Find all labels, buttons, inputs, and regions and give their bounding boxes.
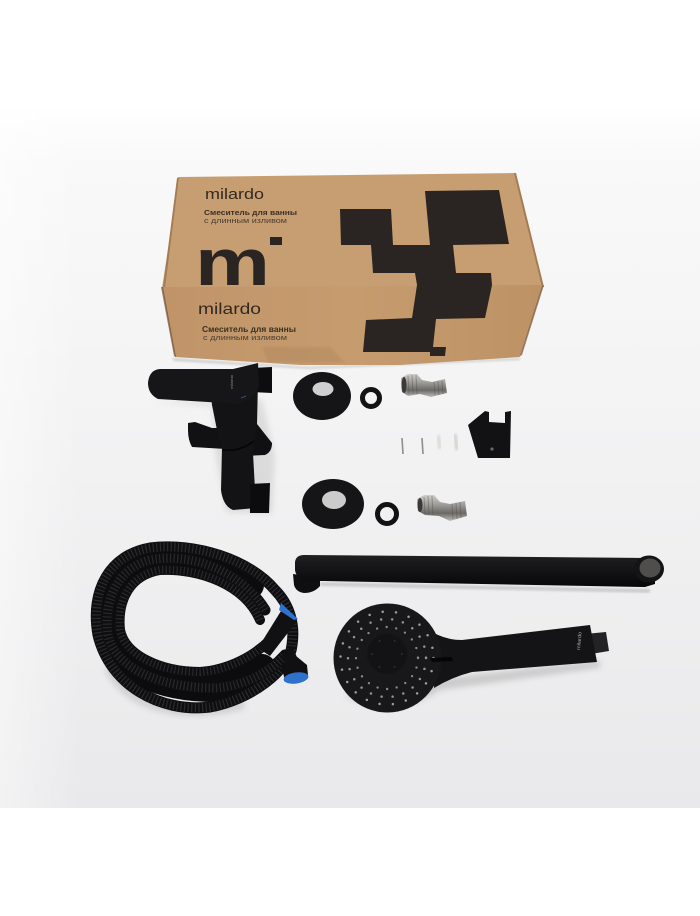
screw right: [422, 438, 423, 454]
faucet lever mark: milardo: [229, 374, 234, 389]
box black graphic pattern: [340, 190, 509, 356]
mode switch: [430, 657, 453, 662]
spout end ring: [634, 556, 664, 582]
hose end nut: [281, 645, 309, 685]
shower handle: [434, 625, 597, 688]
box front side shadows: [161, 285, 544, 357]
nut body: [281, 656, 308, 680]
screw left: [402, 438, 403, 454]
shower thread: [585, 632, 609, 655]
faucet lower nut: [250, 483, 270, 513]
logo dot: [270, 237, 282, 245]
handle brand mark: milardo: [576, 631, 584, 650]
flange hole: [322, 491, 346, 509]
nut blue cap: [283, 671, 309, 685]
product title on front face: Смеситель для ванны: [202, 325, 296, 334]
faucet blue indicator: [241, 396, 246, 398]
cone body: [258, 611, 297, 656]
box top face: [162, 173, 543, 288]
faucet main body: [210, 380, 258, 510]
upper steel adapter: [401, 374, 447, 397]
outer nozzle ring: [340, 612, 434, 704]
faucet body seam: [222, 441, 254, 450]
hose inner strand: [120, 570, 270, 672]
middle nozzle ring: [348, 619, 426, 697]
shower head: [334, 604, 442, 712]
hose middle strand ribs: [107, 558, 285, 688]
adapter threads: [408, 375, 443, 395]
spout aerator: [640, 558, 660, 578]
hose cone connector: [258, 603, 298, 656]
box shadow: [172, 358, 520, 369]
product subtitle on front face: с длинным изливом: [203, 335, 287, 342]
hose outer strand ribs: [96, 547, 293, 708]
centre nozzle plate: [367, 634, 407, 674]
brand name on top face: milardo: [205, 186, 264, 203]
faucet left knob: [188, 422, 226, 449]
spout foot: [293, 574, 320, 593]
lower wall flange: [302, 479, 364, 529]
nut neck: [282, 645, 298, 665]
spray nozzle rings: [340, 612, 434, 704]
inner nozzle ring: [356, 627, 418, 689]
cone blue cap: [279, 603, 298, 620]
bracket screw hole: [490, 447, 494, 451]
long spout: [293, 555, 664, 593]
brand name on front face: milardo: [198, 301, 261, 318]
faucet diverter: [245, 420, 272, 456]
hose inner strand ribs: [120, 570, 270, 672]
adapter silver body: [401, 374, 447, 397]
adapter bore: [402, 377, 406, 393]
plug left: [438, 435, 440, 449]
upper wall flange: [293, 372, 351, 420]
faucet lever handle: [148, 363, 259, 404]
bracket body: [468, 411, 511, 458]
adapter bore: [418, 498, 422, 512]
spout shadow: [320, 584, 650, 591]
screws and wall plugs: [402, 434, 457, 454]
lower steel adapter: [417, 495, 467, 521]
faucet shadow: [155, 400, 275, 514]
adapter threads: [424, 496, 461, 519]
product subtitle on top face: с длинным изливом: [204, 218, 287, 225]
box front face: [162, 285, 543, 365]
upper rubber ring: [362, 390, 380, 406]
hose middle strand: [107, 558, 285, 688]
flange body: [302, 479, 364, 529]
mixer faucet: [148, 363, 275, 514]
shower shadow: [345, 660, 600, 707]
product title on top face: Смеситель для ванны: [204, 208, 297, 217]
hose solid base: [107, 557, 262, 688]
box top flap edges: [163, 173, 544, 288]
spout bar: [295, 555, 655, 587]
hose shadow: [110, 670, 240, 711]
plug right: [455, 434, 457, 450]
lower rubber ring: [378, 504, 396, 524]
centre jets: [372, 639, 402, 669]
faucet upper nut: [250, 367, 272, 393]
cardboard box: [161, 173, 544, 369]
shower hose: [96, 547, 293, 711]
hand shower: [334, 604, 609, 712]
box bottom shading: [262, 347, 345, 363]
adapter silver body: [417, 495, 467, 521]
photo background: [0, 108, 700, 808]
flange hole: [312, 382, 334, 396]
shower holder bracket: [468, 411, 511, 458]
hose outer strand: [96, 547, 293, 708]
flange body: [293, 372, 351, 420]
large logo letter: m: [195, 225, 270, 299]
